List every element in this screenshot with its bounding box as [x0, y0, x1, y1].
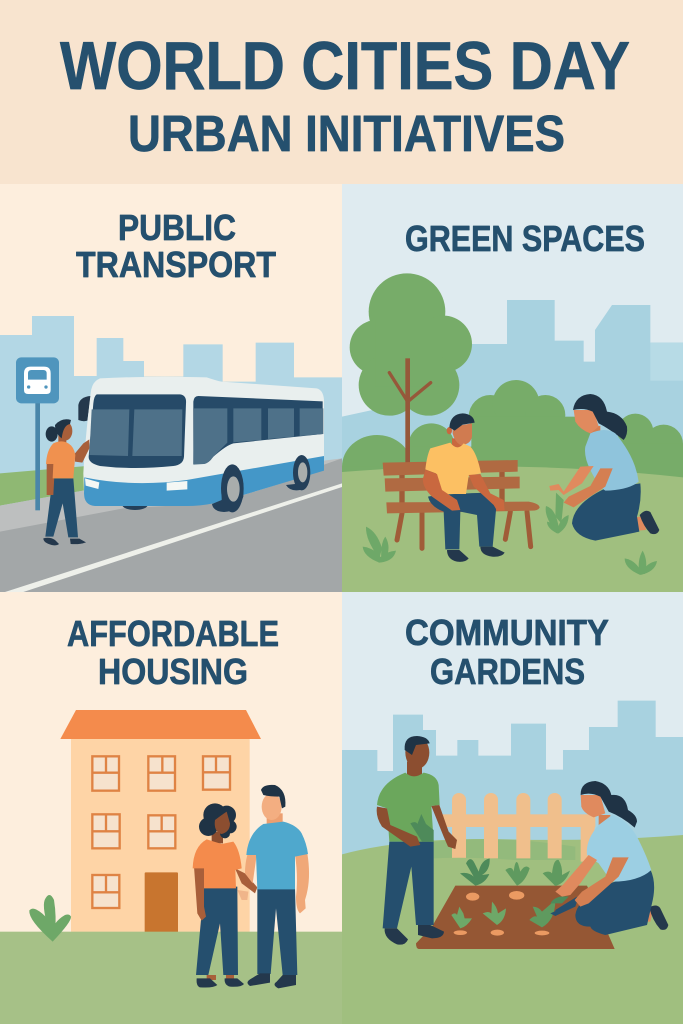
- icon: right tuft: [625, 551, 657, 575]
- heading: affordable housing: HOUSING: [98, 651, 248, 692]
- fence: [442, 793, 595, 862]
- icon: bench: [383, 460, 540, 548]
- heading: green spaces: GREEN SPACES: [405, 218, 645, 259]
- heading: public transport: TRANSPORT: [76, 244, 276, 285]
- panel: public transport: [0, 184, 342, 592]
- front wheel: [212, 464, 244, 512]
- panel: community gardens: [342, 592, 683, 1024]
- woman: [193, 803, 257, 988]
- person waiting: [43, 419, 89, 545]
- heading: public transport: [76, 207, 276, 285]
- man with plant: [377, 736, 457, 945]
- kneeling woman: [549, 394, 659, 541]
- bus: [78, 377, 324, 512]
- carrots: [454, 891, 549, 936]
- apartment building: [60, 710, 261, 934]
- bus stop scene: [0, 316, 342, 592]
- icon: bus stop sign: [16, 357, 59, 510]
- heading: public transport: PUBLIC: [118, 207, 236, 248]
- icon: plant: [29, 895, 71, 942]
- panel: affordable housing: [0, 592, 342, 1024]
- seated man: [423, 413, 505, 562]
- heading: affordable housing: AFFORDABLE: [67, 613, 279, 654]
- kneeling woman gardening: [550, 781, 668, 935]
- park scene: [342, 273, 683, 592]
- soil bed: [416, 886, 615, 949]
- icon: seedling: [546, 493, 569, 533]
- icon: tree: [350, 273, 472, 465]
- plants: [451, 858, 570, 928]
- subtitle: URBAN INITIATIVES: [128, 105, 565, 162]
- rear wheel: [286, 455, 310, 490]
- icon: bushes: [342, 380, 683, 498]
- man: [245, 785, 309, 988]
- heading: affordable housing: [67, 613, 279, 692]
- door: [145, 872, 178, 934]
- heading: community gardens: COMMUNITY: [405, 612, 609, 653]
- garden scene: [342, 701, 683, 1024]
- heading: community gardens: GARDENS: [430, 651, 585, 692]
- housing scene: [0, 710, 342, 1024]
- icon: left tuft: [363, 527, 396, 563]
- header banner: [0, 0, 683, 184]
- panel: green spaces: [342, 184, 683, 592]
- windows: [92, 756, 230, 908]
- heading: community gardens: [405, 612, 609, 692]
